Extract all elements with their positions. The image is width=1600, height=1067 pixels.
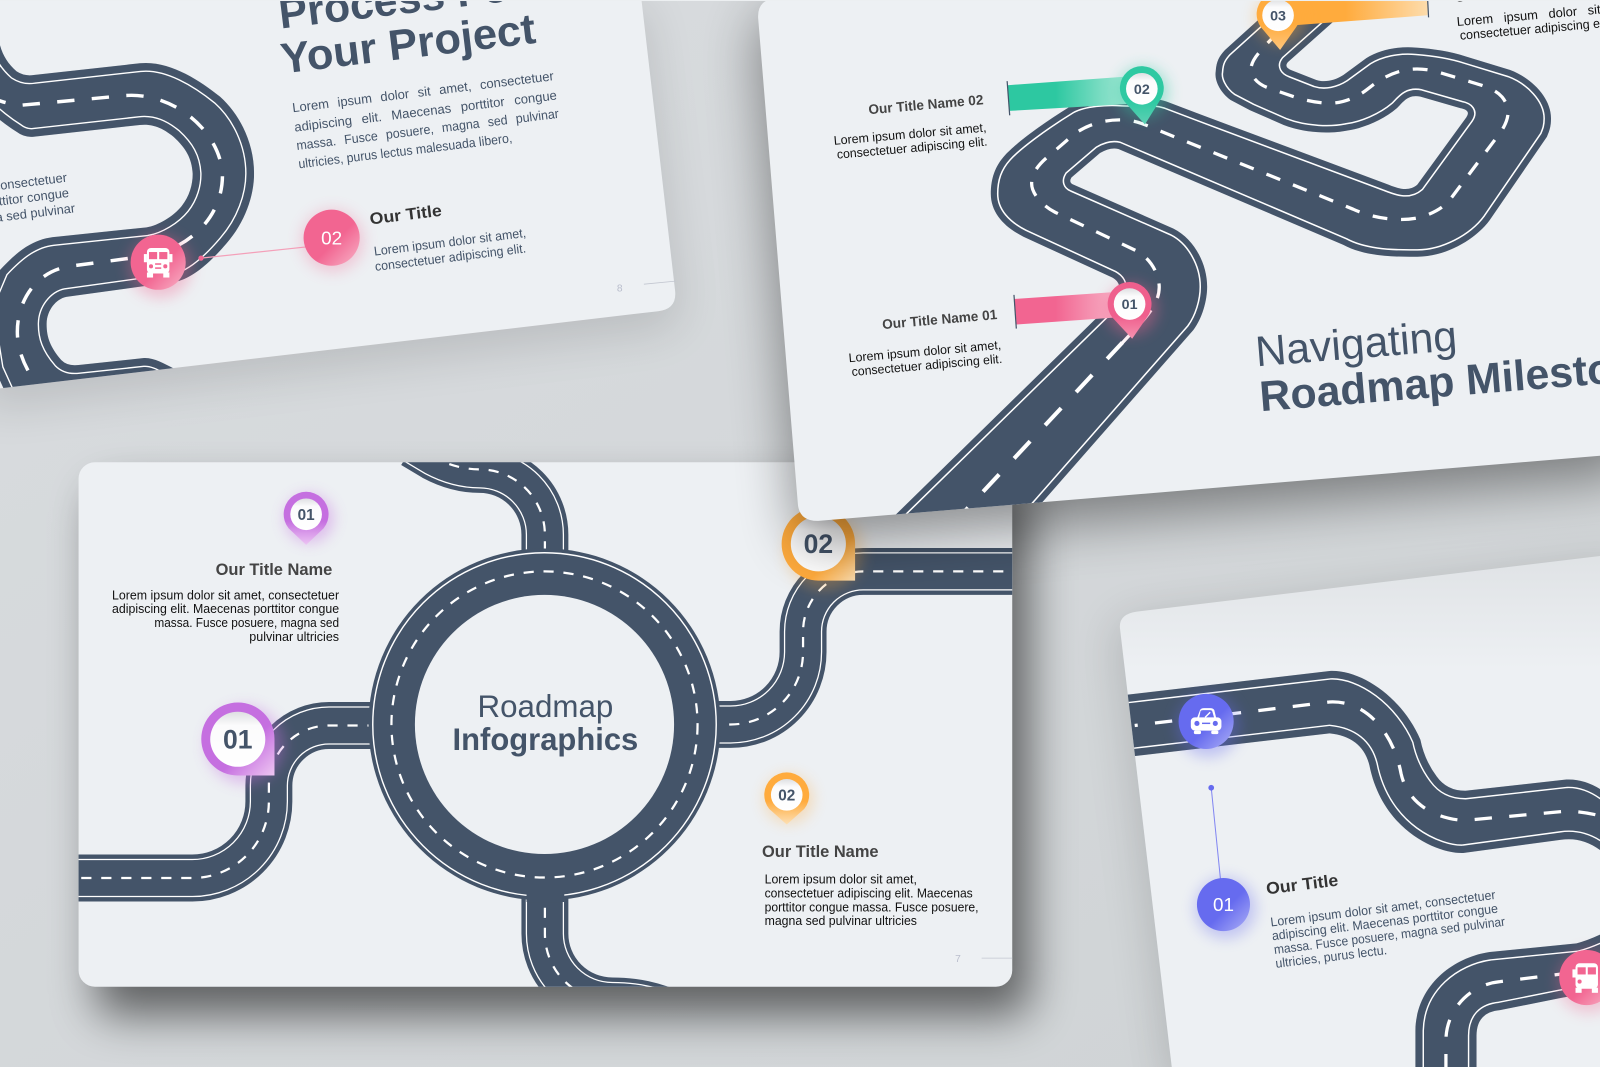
pin: orange 03: 03 (1270, 8, 1286, 24)
panel: bottom-right slide (1116, 552, 1600, 1067)
text block: our title name 02 on road: consectetuer adipiscing elit. (836, 135, 988, 162)
pin: large orange 02: 02 (804, 529, 833, 559)
text block: clipped left description (0, 170, 77, 229)
text block: our title name 01 on road: Our Title Name 01 (882, 307, 998, 332)
road: branches to central ring (78, 462, 1012, 987)
text block: our title step 01: adipiscing elit. Maecenas porttitor congue (1271, 901, 1499, 943)
page number 7: 7 (955, 954, 961, 965)
heading: roadmap infographics (453, 688, 638, 757)
text block: process description: ultricies, purus lectus malesuada libero, (298, 130, 513, 171)
text block: our title step 01: massa. Fusce posuere, magna sed pulvinar (1273, 914, 1506, 957)
text block: our title name 01 on road (848, 307, 1003, 379)
text block: our title step 02: Our Title (369, 202, 443, 228)
text block: process description (291, 68, 560, 171)
text block: our title name 02 on road: Our Title Name 02 (868, 92, 984, 117)
icon: bus marker right (1557, 950, 1600, 1013)
text block: our title step 01 (1265, 871, 1506, 971)
text block: process description: massa. Fusce posuere, magna sed pulvinar (295, 106, 560, 153)
text block: our title name 01: Our Title Name (216, 561, 332, 579)
pin: large orange 02 (782, 507, 863, 590)
text block: our title step 02 (369, 202, 527, 274)
badge: step 02 (301, 209, 364, 272)
pin: orange 03 (1255, 0, 1306, 50)
text block: our title step 01: Lorem ipsum dolor sit amet, consectetuer (1270, 887, 1497, 929)
text block: our title name 01 on road: Lorem ipsum dolor sit amet, (848, 338, 1002, 365)
page number 7 (955, 954, 1012, 965)
icon: bus marker (129, 235, 192, 298)
text block: our title name 02: magna sed pulvinar ultricies (765, 913, 917, 928)
text block: our title name 02: Lorem ipsum dolor sit amet, (765, 871, 917, 886)
text block: our title step 02: consectetuer adipiscing elit. (374, 240, 527, 274)
pin: pink 01: 01 (1122, 297, 1138, 313)
text block: our title name 02 on road (833, 92, 988, 162)
road: lower right road (1415, 923, 1600, 1067)
text block: our title name 01 on road: consectetuer adipiscing elit. (851, 352, 1003, 379)
page number 8 (617, 281, 676, 294)
pin: green 02 (1117, 66, 1168, 124)
connector line: bus to step 02 (198, 247, 306, 261)
pin: small purple 01 (284, 492, 334, 545)
page number 8: 8 (617, 283, 623, 294)
connector line: car to step 01 (1208, 785, 1220, 879)
text block: our title name 02: Our Title Name (762, 843, 879, 861)
text block: our title name 02 on road: Lorem ipsum dolor sit amet, (833, 121, 987, 148)
pin: green 02: 02 (1134, 82, 1150, 98)
panel: top-right slide (758, 0, 1600, 543)
road: top-left winding road (0, 31, 254, 408)
pin: large purple 01 (201, 703, 284, 784)
road: central ring (368, 548, 721, 902)
text block: our title name 01: massa. Fusce posuere, magna sed (154, 615, 339, 630)
pin: pink 01 (1106, 282, 1157, 339)
text block: our title name 01: Lorem ipsum dolor sit amet, consectetuer (112, 587, 340, 602)
text block: our title name 03 on road (1454, 0, 1600, 43)
pin: small orange 02: 02 (778, 787, 795, 804)
badge: step 01: 01 (1213, 894, 1234, 915)
banner: green 02 (1007, 77, 1128, 115)
text block: our title step 01: ultricies, purus lectu. (1275, 942, 1388, 971)
text block: our title name 02: consectetuer adipiscing elit. Maecenas (765, 885, 973, 900)
text block: our title name 01 (112, 561, 340, 644)
road: upper right road (1117, 671, 1600, 1067)
text block: our title name 02: porttitor congue massa. Fusce posuere, (765, 900, 979, 915)
heading: roadmap infographics: Roadmap (478, 688, 613, 724)
panel: main centre slide (61, 445, 1031, 1016)
top edge highlight (0, 0, 1600, 1)
text block: our title name 01: pulvinar ultricies (249, 629, 339, 644)
text block: our title step 02: Lorem ipsum dolor sit amet, (373, 225, 527, 259)
banner: pink 01 (1014, 292, 1117, 329)
pin: small orange 02 (764, 772, 813, 824)
banner: orange 03 (1291, 0, 1429, 26)
icon: car marker (1177, 694, 1240, 757)
text block: our title name 01: adipiscing elit. Maecenas porttitor congue (112, 601, 339, 616)
road: top-right winding road (886, 0, 1551, 527)
badge: step 02: 02 (321, 227, 342, 248)
heading: process title: Your Project (278, 5, 538, 83)
text block: our title name 02 (762, 843, 979, 928)
pin: small purple 01: 01 (298, 507, 315, 524)
heading: roadmap infographics: Infographics (453, 721, 638, 757)
text block: process description: adipiscing elit. Maecenas porttitor congue (293, 88, 558, 135)
badge: step 01 (1195, 878, 1256, 939)
heading: navigating roadmap milestones: Navigating (1254, 312, 1459, 376)
text block: process description: Lorem ipsum dolor sit amet, consectetuer (291, 68, 555, 115)
panel: top-left slide (0, 0, 679, 409)
pin: large purple 01: 01 (223, 724, 253, 754)
text block: our title step 01: Our Title (1265, 871, 1339, 898)
